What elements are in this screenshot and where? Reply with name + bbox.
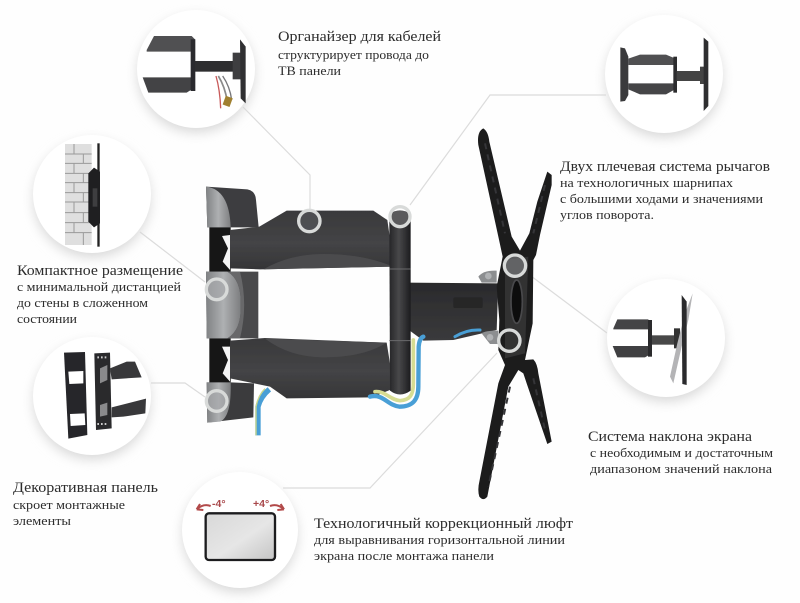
main bracket illustration [206, 128, 552, 499]
text: correction play [314, 516, 574, 563]
text: dual arm system: на технологичных шарнипах [560, 176, 734, 190]
text: cable organizer: ТВ панели [278, 64, 341, 78]
upper arm [230, 211, 394, 269]
vertical column [389, 220, 411, 394]
circle: correction play: -4° [212, 498, 226, 510]
text: correction play: Технологичный коррекционный люфт [314, 516, 574, 532]
circle: cable organizer [137, 10, 255, 132]
wall plate [206, 187, 259, 423]
text: compact placement [17, 263, 183, 326]
circle: correction play: +4° [253, 498, 269, 510]
TV mounting cross [478, 128, 552, 499]
text: decorative panel: скроет монтажные [13, 498, 125, 512]
routed cables [370, 330, 480, 407]
leader lines [140, 95, 607, 488]
text: dual arm system: Двух плечевая система рычагов [560, 159, 770, 175]
text: compact placement: Компактное размещение [17, 263, 183, 279]
circle: tilt system [607, 279, 725, 401]
text: correction play: для выравнивания горизонтальной линии [314, 533, 565, 547]
text: tilt system [588, 429, 773, 476]
highlight rings [206, 207, 526, 411]
text: compact placement: состоянии [17, 312, 77, 326]
forearm [407, 283, 498, 341]
text: dual arm system: углов поворота. [560, 208, 654, 222]
text: compact placement: с минимальной дистанцией [17, 280, 181, 294]
circle: decorative panel [33, 337, 151, 459]
circle: correction play [182, 472, 298, 592]
text: dual arm system: с большими ходами и значениями [560, 192, 763, 206]
text: cable organizer: Органайзер для кабелей [278, 29, 441, 45]
text: decorative panel: элементы [13, 514, 72, 528]
text: tilt system: Система наклона экрана [588, 429, 753, 445]
circle: dual arm system [605, 15, 723, 137]
text: tilt system: диапазоном значений наклона [590, 462, 773, 476]
text: dual arm system [560, 159, 770, 222]
lower arm [230, 338, 394, 398]
text: cable organizer: структурирует провода до [278, 48, 429, 62]
text: cable organizer [278, 29, 441, 78]
column cap [389, 210, 411, 227]
text: decorative panel: Декоративная панель [13, 480, 158, 496]
forearm badge [453, 297, 483, 308]
text: decorative panel [13, 480, 158, 528]
circle: compact placement [33, 135, 151, 257]
text: compact placement: до стены в сложенном [17, 296, 148, 310]
text: correction play: экрана после монтажа панели [314, 549, 494, 563]
text: tilt system: с необходимым и достаточным [590, 446, 773, 460]
cable at the wall side [256, 389, 269, 435]
